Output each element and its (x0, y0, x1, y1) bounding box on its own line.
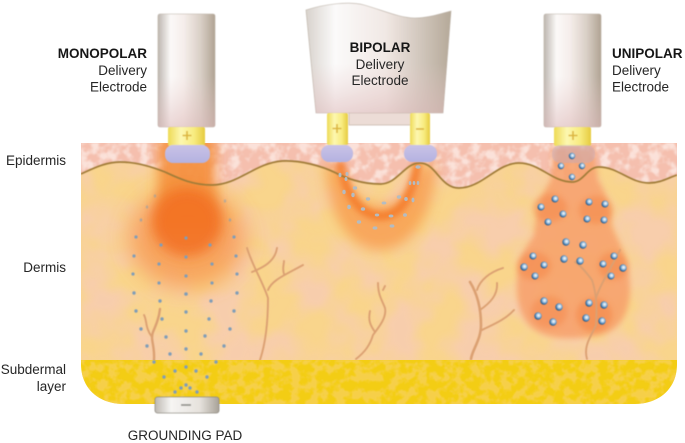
dermis layer (81, 143, 677, 363)
label: dermis: Dermis (23, 260, 66, 275)
unipolar heat zone (517, 147, 630, 338)
label: bipolar: BIPOLAR (350, 40, 411, 55)
label: grounding pad: GROUNDING PAD (128, 428, 242, 443)
label: epidermis: Epidermis (6, 153, 66, 168)
grounding pad (155, 397, 219, 413)
label: subdermal layer: layer (37, 379, 66, 394)
label: subdermal layer: Subdermal (1, 362, 66, 377)
label: bipolar: Electrode (351, 73, 409, 88)
epidermis-dermis boundary line (81, 161, 677, 188)
label: unipolar: UNIPOLAR (612, 46, 683, 61)
label: unipolar: Electrode (612, 80, 669, 94)
blood vessels (144, 248, 620, 360)
epidermis layer (81, 143, 677, 189)
panel: skin cross-section (81, 136, 677, 406)
bipolar current dots (338, 158, 421, 230)
monopolar heat zone (129, 136, 245, 288)
label: bipolar: Delivery (356, 57, 405, 72)
subdermal layer (81, 360, 677, 406)
label: monopolar: Electrode (90, 80, 147, 94)
bipolar heat zone (326, 160, 436, 250)
monopolar current dots (131, 194, 239, 394)
unipolar electrode (544, 14, 601, 163)
unipolar charged particles (520, 153, 627, 326)
monopolar electrode (158, 14, 215, 163)
label: unipolar: Delivery (612, 63, 661, 78)
label: monopolar: Delivery (98, 63, 147, 78)
bipolar electrode (306, 3, 451, 162)
label: monopolar: MONOPOLAR (58, 46, 147, 61)
